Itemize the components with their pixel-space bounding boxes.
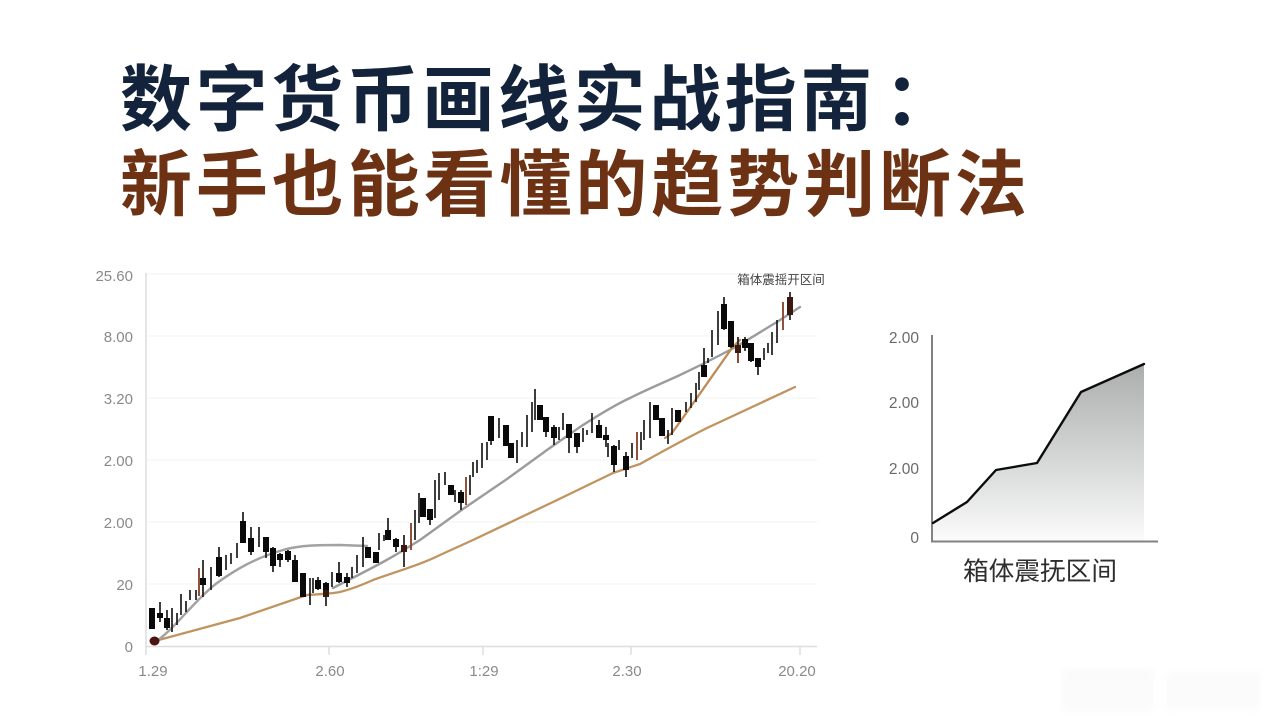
- inset area chart: [889, 330, 1158, 586]
- area line: [933, 364, 1144, 523]
- gray moving average rising: [333, 307, 800, 588]
- inset y labels: 2.00: [889, 330, 919, 347]
- title line 1: 数字货币画线实战指南：: [120, 61, 960, 141]
- reddish candles: [199, 302, 783, 596]
- orange short trend line: [665, 340, 740, 438]
- y axis labels: 2.00: [104, 453, 133, 470]
- inset y labels: 0: [910, 530, 919, 547]
- inset y labels: 2.00: [889, 395, 919, 412]
- main candlestick chart: [95, 268, 825, 680]
- x axis labels: [138, 663, 816, 680]
- y axis labels: 2.00: [104, 515, 133, 532]
- x axis labels: 20.20: [778, 663, 816, 680]
- grid lines and axes: [146, 273, 817, 655]
- y axis labels: 3.20: [104, 391, 133, 408]
- trend lines: [155, 307, 800, 641]
- title: [120, 61, 1031, 226]
- x axis labels: 1.29: [138, 663, 168, 680]
- candle bodies: [152, 304, 758, 629]
- y axis labels: 25.60: [95, 268, 133, 285]
- start point marker: [150, 636, 160, 646]
- title line 2: 新手也能看懂的趋势判断法: [120, 146, 1031, 226]
- y axis labels: [95, 268, 133, 656]
- y axis labels: 20: [116, 577, 133, 594]
- inset axes: [932, 335, 1158, 542]
- tan support trend line: [155, 387, 795, 641]
- inset y labels: [889, 330, 919, 547]
- x axis labels: 2.60: [315, 663, 345, 680]
- gray moving average hump: [158, 545, 367, 640]
- x axis labels: 2.30: [612, 663, 642, 680]
- shaded area: [933, 364, 1144, 541]
- faint watermark: [1062, 668, 1260, 712]
- dark brown candle bodies: [326, 297, 790, 597]
- y axis labels: 8.00: [104, 329, 133, 346]
- chart annotation: 箱体震摇开区间: [737, 272, 825, 287]
- candle wicks and thin candles: [160, 292, 790, 632]
- inset y labels: 2.00: [889, 461, 919, 478]
- y axis labels: 0: [125, 639, 133, 656]
- inset caption: 箱体震抚区间: [963, 557, 1117, 586]
- x axis labels: 1:29: [469, 663, 499, 680]
